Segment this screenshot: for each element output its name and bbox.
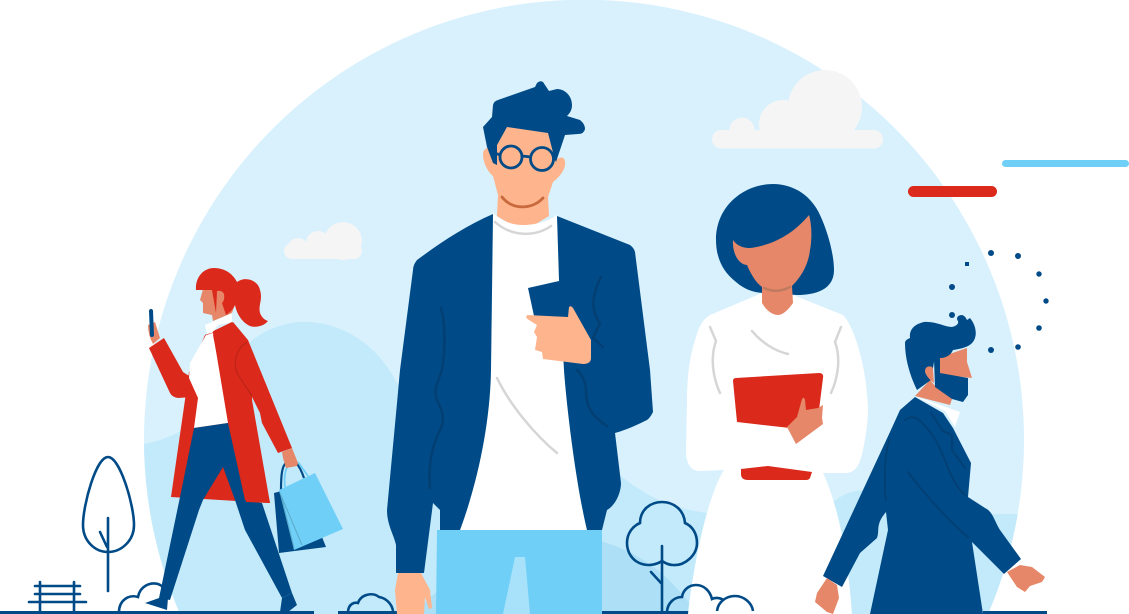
hair and ponytail [196, 268, 268, 327]
tablet lower edge [741, 466, 812, 480]
hand [787, 398, 823, 444]
arm with phone [149, 338, 195, 398]
sky bag [279, 473, 343, 550]
bag handles [281, 463, 304, 490]
bearded man in suit [815, 315, 1045, 614]
phone [151, 311, 152, 335]
phone [528, 281, 570, 320]
bush: middle [348, 594, 393, 611]
left hand [395, 573, 432, 614]
collar [205, 313, 232, 334]
hand holding phone [526, 306, 591, 364]
jacket right [557, 216, 653, 530]
collar [915, 396, 960, 427]
jacket creases [429, 277, 607, 488]
bag crease [280, 493, 302, 548]
hands [815, 565, 1045, 614]
background circle with hills [130, 0, 1030, 614]
woman in red with shopping bags [145, 268, 343, 612]
sky bag handle [285, 462, 308, 487]
red tablet [733, 373, 823, 428]
glasses [495, 146, 556, 170]
woman in white with tablet [686, 184, 868, 614]
coat creases [885, 413, 968, 537]
shirt crease [497, 378, 557, 453]
coat front [213, 322, 292, 503]
cloud: small [284, 222, 362, 260]
decorative bars [908, 160, 1129, 197]
trouser gap [503, 557, 530, 614]
face [733, 215, 811, 315]
navy bag [274, 490, 326, 553]
neck [915, 380, 952, 405]
cloud: large [712, 70, 883, 148]
hair [716, 184, 834, 295]
trousers [159, 423, 292, 600]
ground lines [0, 611, 1047, 614]
ear [925, 366, 934, 383]
beard [934, 358, 968, 402]
tree: round [627, 502, 697, 611]
trousers [436, 530, 602, 614]
hair [905, 315, 976, 390]
bush: left [119, 584, 166, 612]
neck and head [483, 122, 565, 232]
dress creases [710, 327, 841, 393]
hands [148, 322, 298, 468]
face and neck [200, 289, 240, 321]
coat seam [235, 342, 252, 396]
coat [823, 397, 1021, 614]
dress [686, 293, 868, 614]
white shirt [189, 333, 228, 428]
jacket left [387, 214, 493, 573]
t-shirt [460, 213, 587, 530]
central man with glasses [387, 81, 653, 614]
dotted circle [949, 250, 1049, 353]
tree: teardrop [83, 457, 134, 591]
bush: right [667, 585, 753, 611]
face [938, 348, 972, 378]
shoes [145, 593, 297, 612]
bench [29, 582, 86, 611]
hair [483, 81, 585, 165]
neck line [764, 287, 790, 291]
collar crease [495, 222, 551, 234]
smile [502, 197, 543, 207]
coat back [171, 322, 270, 503]
